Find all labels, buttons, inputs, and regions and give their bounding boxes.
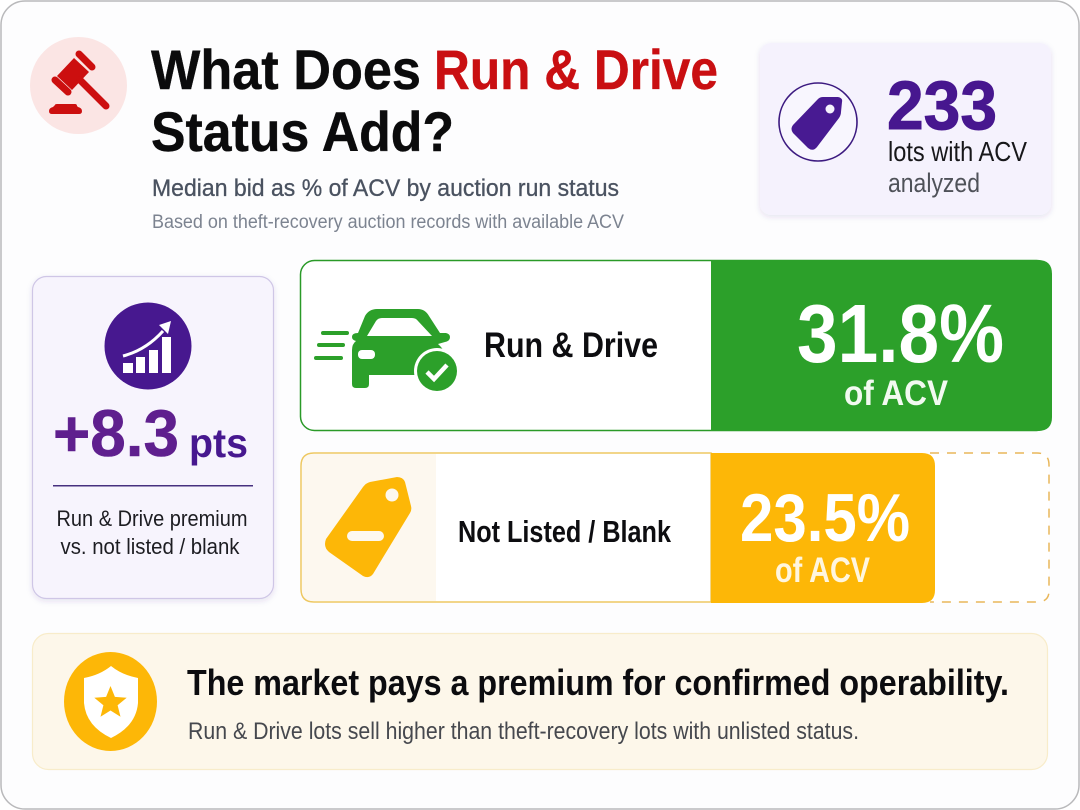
premium caption	[56, 506, 248, 559]
icon: tag with minus	[325, 477, 411, 577]
label: Not Listed / Blank	[458, 514, 672, 549]
panel: lots analyzed	[760, 43, 1051, 215]
value: 31.8%	[797, 287, 1004, 380]
stat: 233: 233	[887, 67, 997, 144]
panel: Run & Drive bar: of ACV	[844, 374, 949, 413]
title: Status Add?	[151, 100, 454, 163]
panel: premium	[32, 276, 274, 598]
stat: +8.3 pts: +8.3	[53, 396, 179, 470]
stat label: analyzed	[888, 168, 980, 198]
icon: rising bars	[104, 302, 192, 390]
title: What Does	[151, 38, 421, 101]
subtitle: Median bid as % of ACV by auction run status	[152, 175, 619, 202]
panel: Run & Drive bar	[300, 260, 1052, 431]
takeaway heading: The market pays a premium for confirmed operability.	[187, 662, 1009, 703]
takeaway text: Run & Drive lots sell higher than theft-recovery lots with unlisted status.	[188, 718, 859, 745]
icon: gavel in pink circle	[30, 37, 127, 134]
value: 23.5%	[740, 480, 910, 556]
icon: car with check	[316, 309, 460, 394]
panel: takeaway	[32, 634, 1048, 770]
icon: price tag	[779, 83, 857, 161]
panel: Not Listed bar: of ACV	[775, 551, 871, 590]
stat label: lots with ACV	[888, 136, 1027, 167]
stat: +8.3 pts: pts	[189, 420, 248, 466]
title	[151, 38, 718, 163]
panel: Not Listed bar	[301, 453, 1049, 603]
title: Run & Drive	[434, 38, 718, 101]
icon: shield with star	[64, 652, 157, 751]
stat label	[888, 136, 1027, 198]
label: Run & Drive	[484, 326, 658, 365]
stat: +8.3 pts	[53, 396, 248, 470]
premium caption: Run & Drive premium	[56, 506, 248, 531]
source note: Based on theft-recovery auction records with available ACV	[152, 212, 624, 233]
premium caption: vs. not listed / blank	[60, 534, 240, 559]
